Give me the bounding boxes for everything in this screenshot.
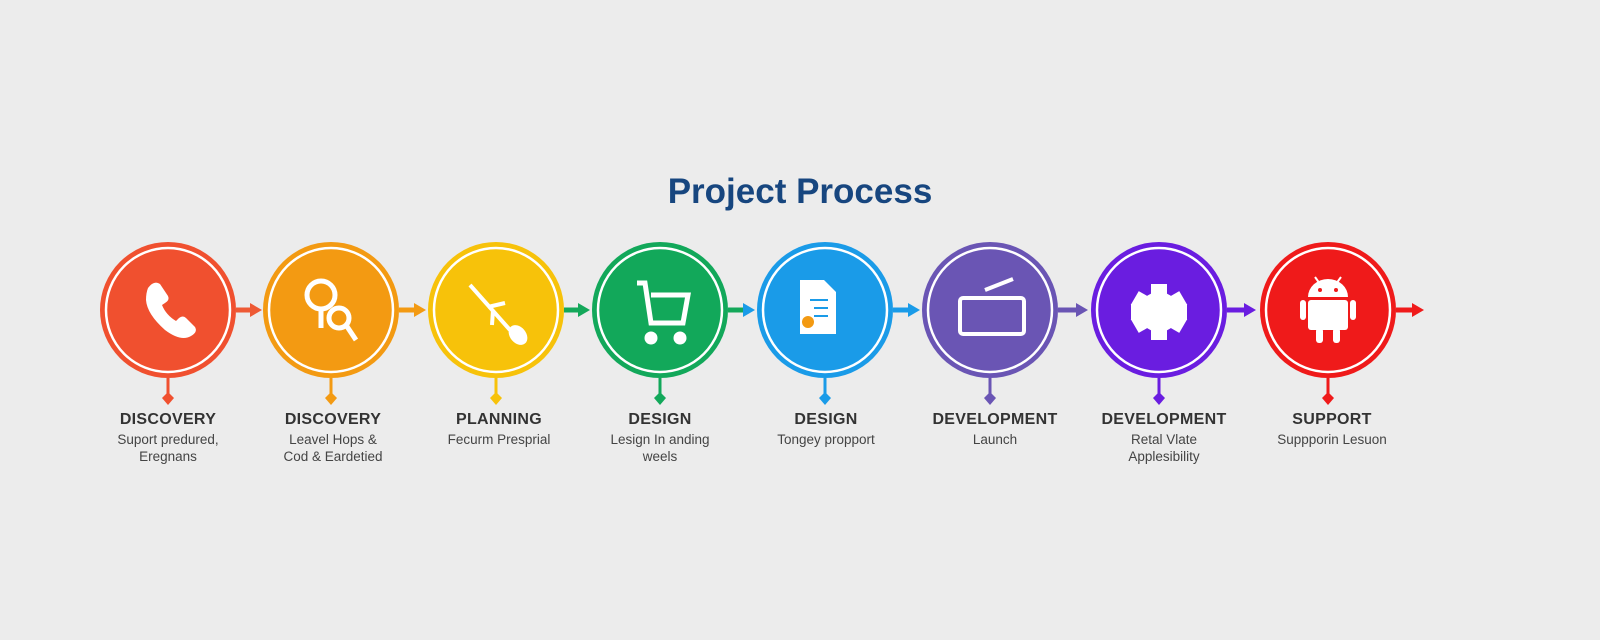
label 7: DEVELOPMENT <box>1101 411 1227 428</box>
label 4: Lesign In anding <box>610 432 710 447</box>
label 8: Suppporin Lesuon <box>1277 432 1387 447</box>
label 2: DISCOVERY <box>285 411 381 428</box>
label 3: PLANNING <box>456 411 542 428</box>
label 4 <box>610 411 710 464</box>
arrows <box>236 303 1424 317</box>
label 1: Eregnans <box>139 449 197 464</box>
label 4: weels <box>643 449 677 464</box>
label 3: Fecurm Presprial <box>448 432 550 447</box>
label 6 <box>932 411 1058 447</box>
label 7: Applesibility <box>1128 449 1200 464</box>
label 2: Cod & Eardetied <box>283 449 383 464</box>
label 5: Tongey propport <box>777 432 875 447</box>
title: Project Process <box>668 172 932 211</box>
icon: gear <box>1131 284 1187 340</box>
icon: tool <box>470 285 531 349</box>
label 3 <box>448 411 550 447</box>
label 6: DEVELOPMENT <box>932 411 1058 428</box>
step circles <box>100 242 1396 405</box>
icon: tablet <box>960 279 1024 334</box>
label 4: DESIGN <box>628 411 692 428</box>
icon: phone <box>146 283 196 338</box>
icon: magnifiers <box>307 281 356 340</box>
label 8: SUPPORT <box>1292 411 1372 428</box>
label 2: Leavel Hops & <box>289 432 377 447</box>
icon: document <box>800 280 836 334</box>
icon: android <box>1300 277 1356 343</box>
icon: cart <box>637 283 688 342</box>
label 6: Launch <box>973 432 1017 447</box>
label 7 <box>1101 411 1227 464</box>
label 7: Retal Vlate <box>1131 432 1197 447</box>
label 5: DESIGN <box>794 411 858 428</box>
label 1: Suport predured, <box>117 432 219 447</box>
label 2 <box>283 411 383 464</box>
label 5 <box>777 411 875 447</box>
label 1 <box>117 411 219 464</box>
label 1: DISCOVERY <box>120 411 216 428</box>
label 8 <box>1277 411 1387 447</box>
